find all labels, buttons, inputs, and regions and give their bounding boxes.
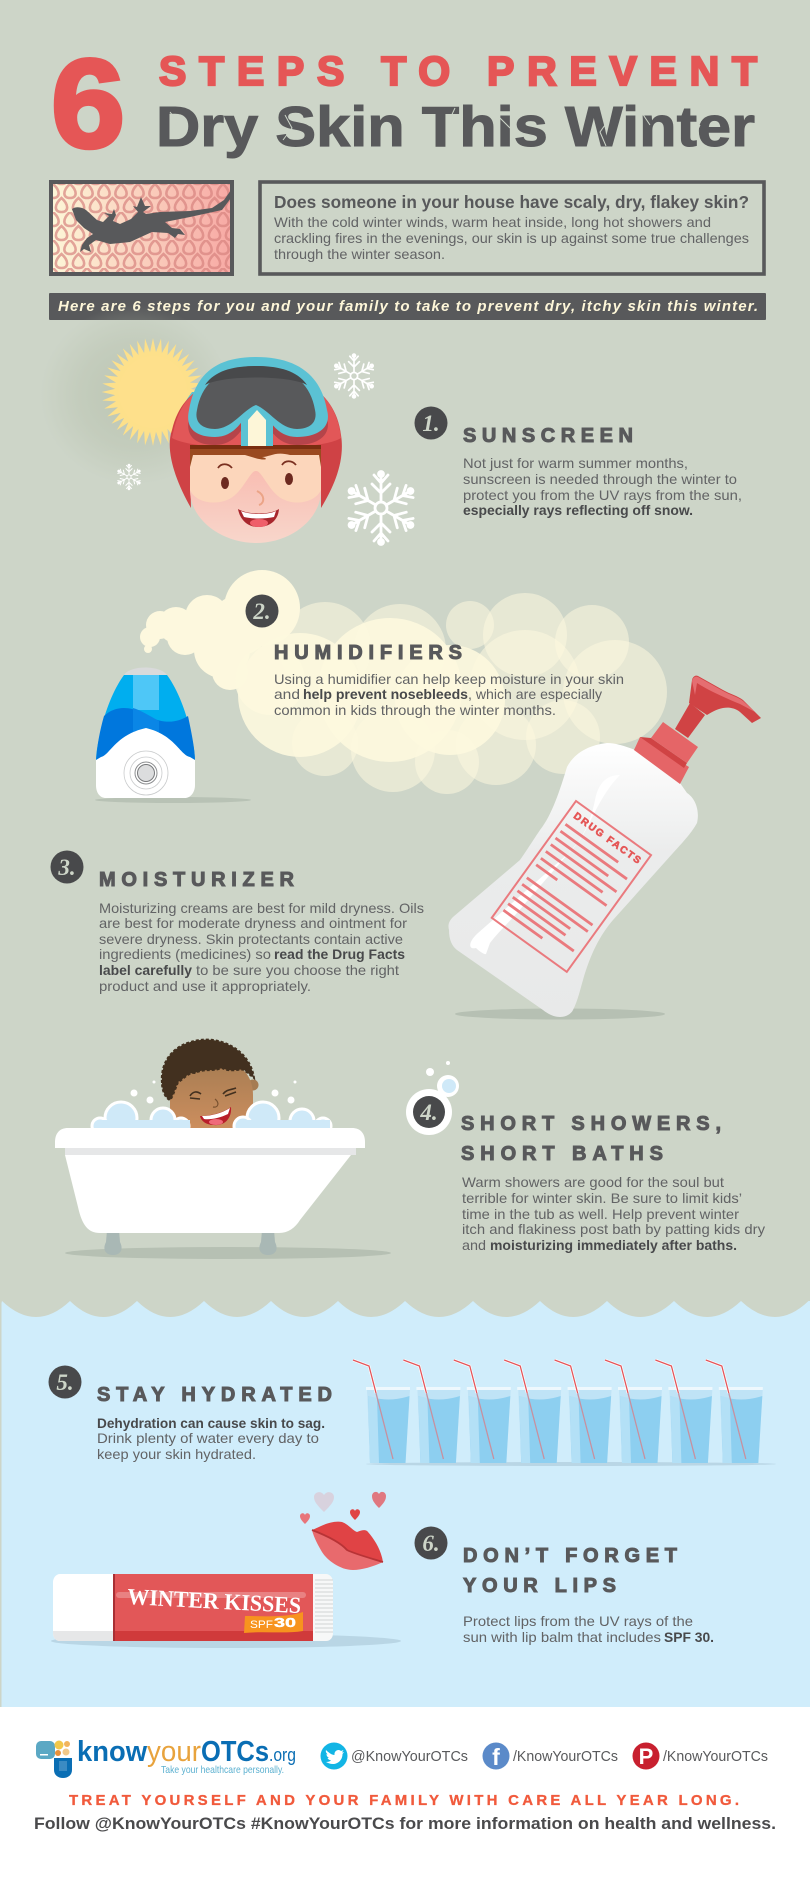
step 3 body: are best for moderate dryness and ointment for [99,915,407,931]
step 2 body: , which are especially [468,686,602,702]
label: drug facts: DRUG FACTS [571,811,643,867]
badge 5: 5. [56,1370,74,1395]
icon: sun [102,338,204,446]
step 4 body: Warm showers are good for the soul but [462,1174,724,1190]
step 5 body: keep your skin hydrated. [97,1446,256,1462]
logo: your [147,1736,201,1768]
step 6 heading: DON’T FORGET [463,1545,677,1567]
step 1 body: Not just for warm summer months, [463,455,688,471]
step 3 body: severe dryness. Skin protectants contain active [99,931,403,947]
icon: snowflake large [345,472,417,544]
step 3 body: ingredients (medicines) so [99,946,271,962]
badge 4: 4. [419,1100,438,1125]
badge 5 [48,1366,82,1398]
icon: hearts [300,1492,386,1524]
footer tagline: TREAT YOURSELF AND YOUR FAMILY WITH CARE ALL YEAR LONG. [69,1792,739,1809]
step 1 body [463,455,742,518]
step 5 body [97,1415,325,1462]
illustration: child in ski goggles [170,357,342,543]
title line: steps to prevent: STEPS TO PREVENT [159,48,757,94]
step 1 body: especially rays reflecting off snow. [463,502,693,518]
step 2 body: help prevent nosebleeds [303,686,468,702]
step 6 heading: YOUR LIPS [463,1575,616,1597]
panel: blue water section [0,1300,810,1707]
facebook handle: /KnowYourOTCs [513,1748,618,1765]
icon: facebook [482,1742,510,1770]
intro body: through the winter season. [274,246,445,262]
icon: lizard [72,190,231,252]
step 3 body: label carefully [99,962,192,978]
intro body: crackling fires in the evenings, our skin is up against some true challenges [274,230,749,246]
badge 1: 1. [422,411,440,436]
step 2 body: Using a humidifier can help keep moisture in your skin [274,671,624,687]
step 2 body: common in kids through the winter months. [274,702,556,718]
bubbles [90,1100,332,1128]
spf flag: 30 [274,1615,296,1630]
step 4 body: time in the tub as well. Help prevent winter [462,1206,739,1222]
step 5 body: Dehydration can cause skin to sag. [97,1415,325,1431]
intro heading: Does someone in your house have scaly, dry, flakey skin? [274,192,749,212]
step 1 body: protect you from the UV rays from the sun, [463,487,742,503]
twitter handle: @KnowYourOTCs [351,1748,468,1765]
icon: pinterest: P [639,1744,653,1769]
logo: Take your healthcare personally. [161,1764,284,1776]
balm brand name: WINTER KISSES [127,1584,302,1618]
illustration: child in bath [55,1040,391,1259]
step 4 body: terrible for winter skin. Be sure to limit kids’ [462,1190,742,1206]
icon: twitter [320,1742,348,1770]
goggles [188,357,328,437]
step 6 heading [463,1545,677,1597]
step 1 body: sunscreen is needed through the winter to [463,471,737,487]
step 4 body [462,1174,765,1253]
badge 3 [50,850,84,884]
step 3 body: to be sure you choose the right [196,962,399,978]
intro body [274,214,749,262]
spf flag: SPF [250,1619,273,1631]
logo: .org [269,1745,296,1765]
step 3 body: Moisturizing creams are best for mild dryness. Oils [99,900,424,916]
step 6 body: SPF 30. [664,1629,714,1645]
badge 1 [414,406,448,440]
step 4 body: moisturizing immediately after baths. [490,1237,737,1253]
step 4 heading: SHORT BATHS [461,1143,663,1165]
badge 4 [406,1061,459,1135]
step 3 heading: MOISTURIZER [99,869,295,891]
step 6 body: Protect lips from the UV rays of the [463,1613,693,1629]
step 1 heading: SUNSCREEN [463,425,633,447]
sun glow [40,305,230,485]
tub shadow [65,1247,391,1259]
badge 6 [414,1526,448,1560]
illustration: pump bottle [448,676,761,1020]
panel: intro question [260,182,764,274]
illustration: humidifier [95,668,251,803]
eyes [218,461,296,489]
banner: Here are 6 steps for you and your family to take to prevent dry, itchy skin this winter. [58,298,758,315]
illustration: lip balm [51,1574,401,1648]
step 6 body [463,1613,714,1645]
child [162,1040,258,1128]
title line: dry skin this winter: Dry Skin This Winter [156,95,755,159]
step 4 body: and [462,1237,486,1253]
icon: snowflake top [332,354,376,398]
logo: know [77,1736,147,1768]
panel: scaly skin with lizard [51,182,232,274]
step 5 heading: STAY HYDRATED [97,1384,332,1406]
step 6 body: sun with lip balm that includes [463,1629,661,1645]
badge 2 [246,594,278,628]
icon: snowflake small [116,464,142,490]
logo: OTCs [201,1736,269,1768]
step 2 body: and [274,686,300,702]
badge 3: 3. [57,855,76,880]
illustration: lips [312,1522,383,1570]
step 3 body: read the Drug Facts [274,946,405,962]
tub feet [104,1224,277,1255]
step 3 body: product and use it appropriately. [99,978,311,994]
footer follow line: Follow @KnowYourOTCs #KnowYourOTCs for more information on health and wellness. [34,1815,776,1833]
logo [36,1736,296,1778]
badge 6: 6. [422,1531,440,1556]
pinterest handle: /KnowYourOTCs [663,1748,768,1765]
cloud of steam [140,570,667,794]
intro body: With the cold winter winds, warm heat inside, long hot showers and [274,214,711,230]
step 2 heading: HUMIDIFIERS [274,642,462,664]
icon: pinterest [632,1742,660,1770]
step 3 body [99,900,424,994]
label: drug facts [492,801,651,972]
spf flag [244,1612,303,1633]
title [51,33,757,174]
step 4 heading: SHORT SHOWERS, [461,1113,721,1135]
tub [65,1155,351,1233]
mouth [238,509,279,527]
illustration: eight glasses of water [353,1360,776,1466]
panel: footer [0,1707,810,1888]
icon: facebook: f [492,1744,500,1770]
title numeral 6: 6 [51,33,125,174]
banner [49,293,766,320]
step 5 body: Drink plenty of water every day to [97,1430,319,1446]
step 4 body: itch and flakiness post bath by patting kids dry [462,1221,765,1237]
step 4 heading [461,1113,721,1165]
badge 2: 2. [252,599,271,624]
step 2 body [274,671,624,718]
